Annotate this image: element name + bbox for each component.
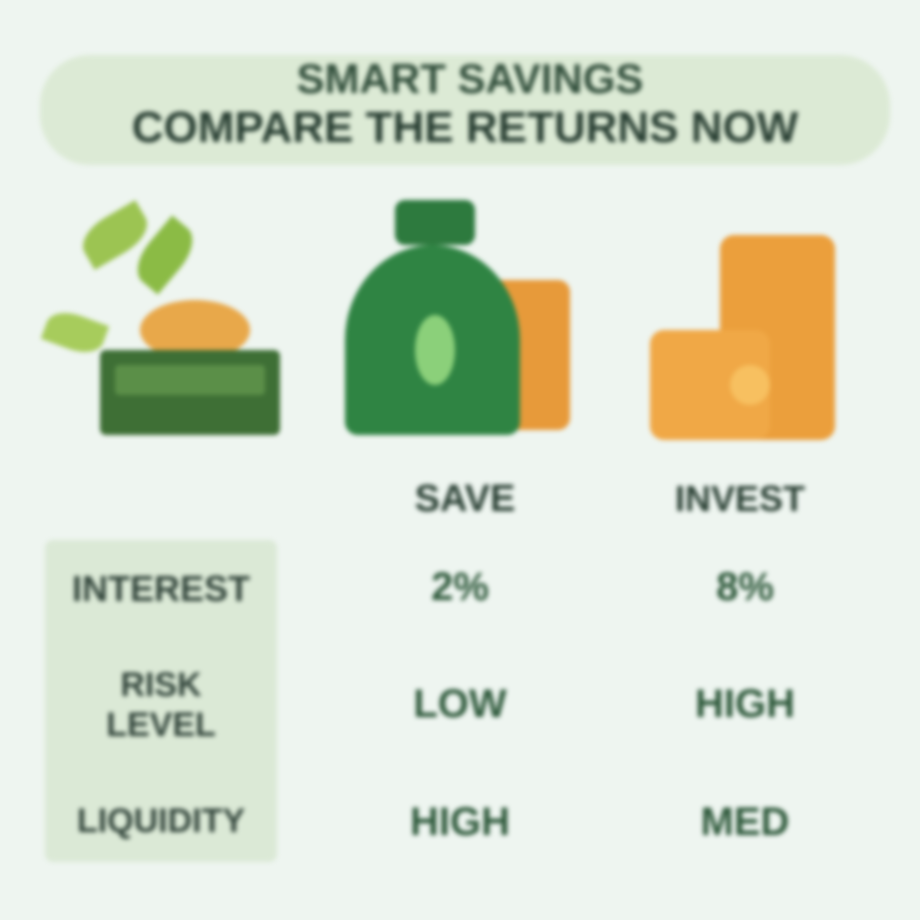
values row 2: LOW	[413, 682, 507, 726]
label row 1: INTEREST	[72, 568, 250, 609]
header: column 3: INVEST	[675, 478, 805, 519]
text: 8%	[716, 565, 774, 609]
text: HIGH	[695, 682, 795, 726]
label row 2: RISK	[120, 666, 202, 704]
label row 2	[105, 666, 218, 744]
title banner	[40, 55, 890, 165]
title line 1: SMART SAVINGS	[297, 55, 643, 102]
icon: coin stack	[646, 231, 839, 444]
icon: plant with coins and cash	[38, 198, 284, 439]
title line 2: COMPARE THE RETURNS NOW	[132, 103, 798, 152]
label row 2: LEVEL	[106, 706, 216, 744]
text: MED	[701, 800, 789, 844]
values row 3: HIGH	[410, 800, 510, 844]
header: column 2: SAVE	[415, 478, 515, 520]
icon: money bag with coin stack	[341, 196, 574, 439]
values row 1: 2%	[431, 565, 489, 609]
label row 3: LIQUIDITY	[77, 802, 245, 840]
panel: row labels	[45, 540, 277, 862]
